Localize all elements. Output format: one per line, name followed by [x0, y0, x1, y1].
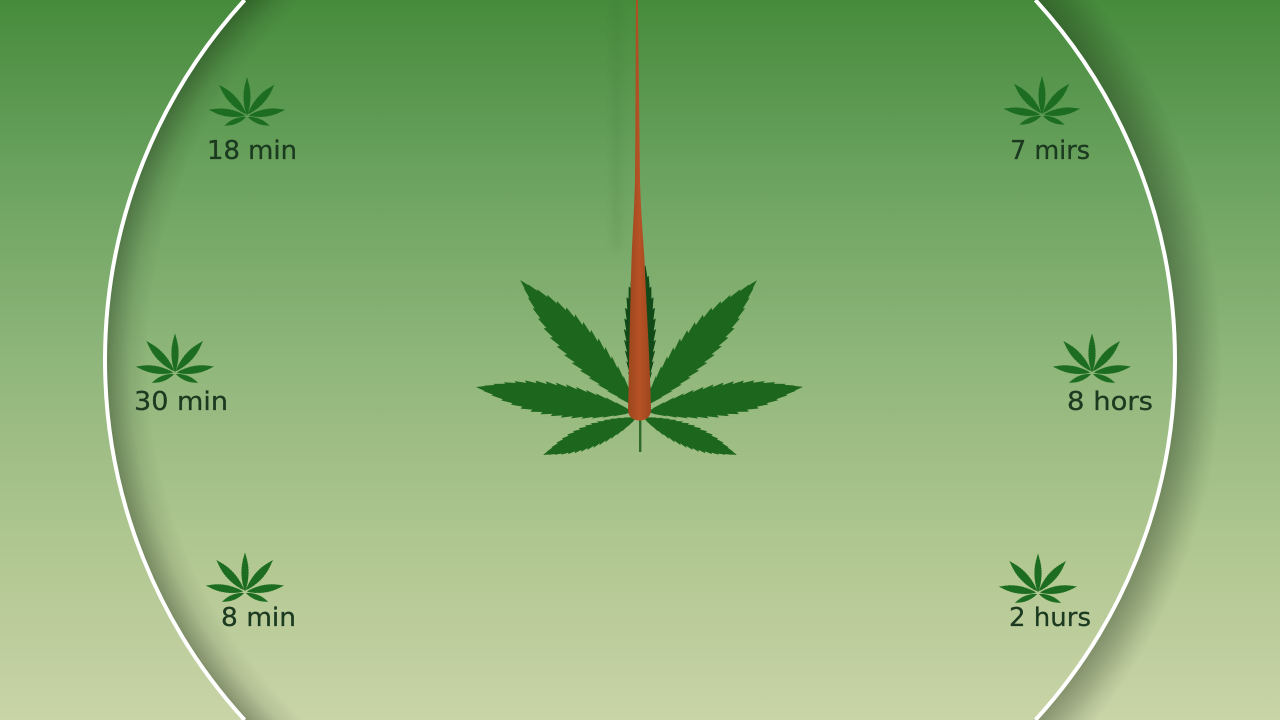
label: 8 min: 8 min: [221, 603, 296, 633]
marker: 2 hurs: [998, 553, 1091, 633]
marker: 18 min: [207, 77, 297, 166]
label: 2 hurs: 2 hurs: [1009, 603, 1091, 633]
icon: small leaf: [135, 333, 215, 386]
marker: 30 min: [134, 333, 228, 417]
label: 18 min: 18 min: [207, 136, 297, 166]
marker: 8 hors: [1052, 333, 1153, 417]
label: 7 mirs: 7 mirs: [1010, 136, 1090, 166]
icon: small leaf: [208, 77, 286, 128]
icon: small leaf: [1052, 333, 1132, 386]
central cannabis leaf: [473, 248, 806, 466]
label: 30 min: 30 min: [134, 387, 228, 417]
icon: small leaf: [1003, 76, 1081, 127]
clock hand: joint: [613, 0, 651, 420]
icon: small leaf: [998, 553, 1078, 606]
icon: small leaf: [205, 552, 285, 605]
marker: 7 mirs: [1003, 76, 1090, 166]
marker: 8 min: [205, 552, 296, 633]
label: 8 hors: 8 hors: [1067, 387, 1153, 417]
